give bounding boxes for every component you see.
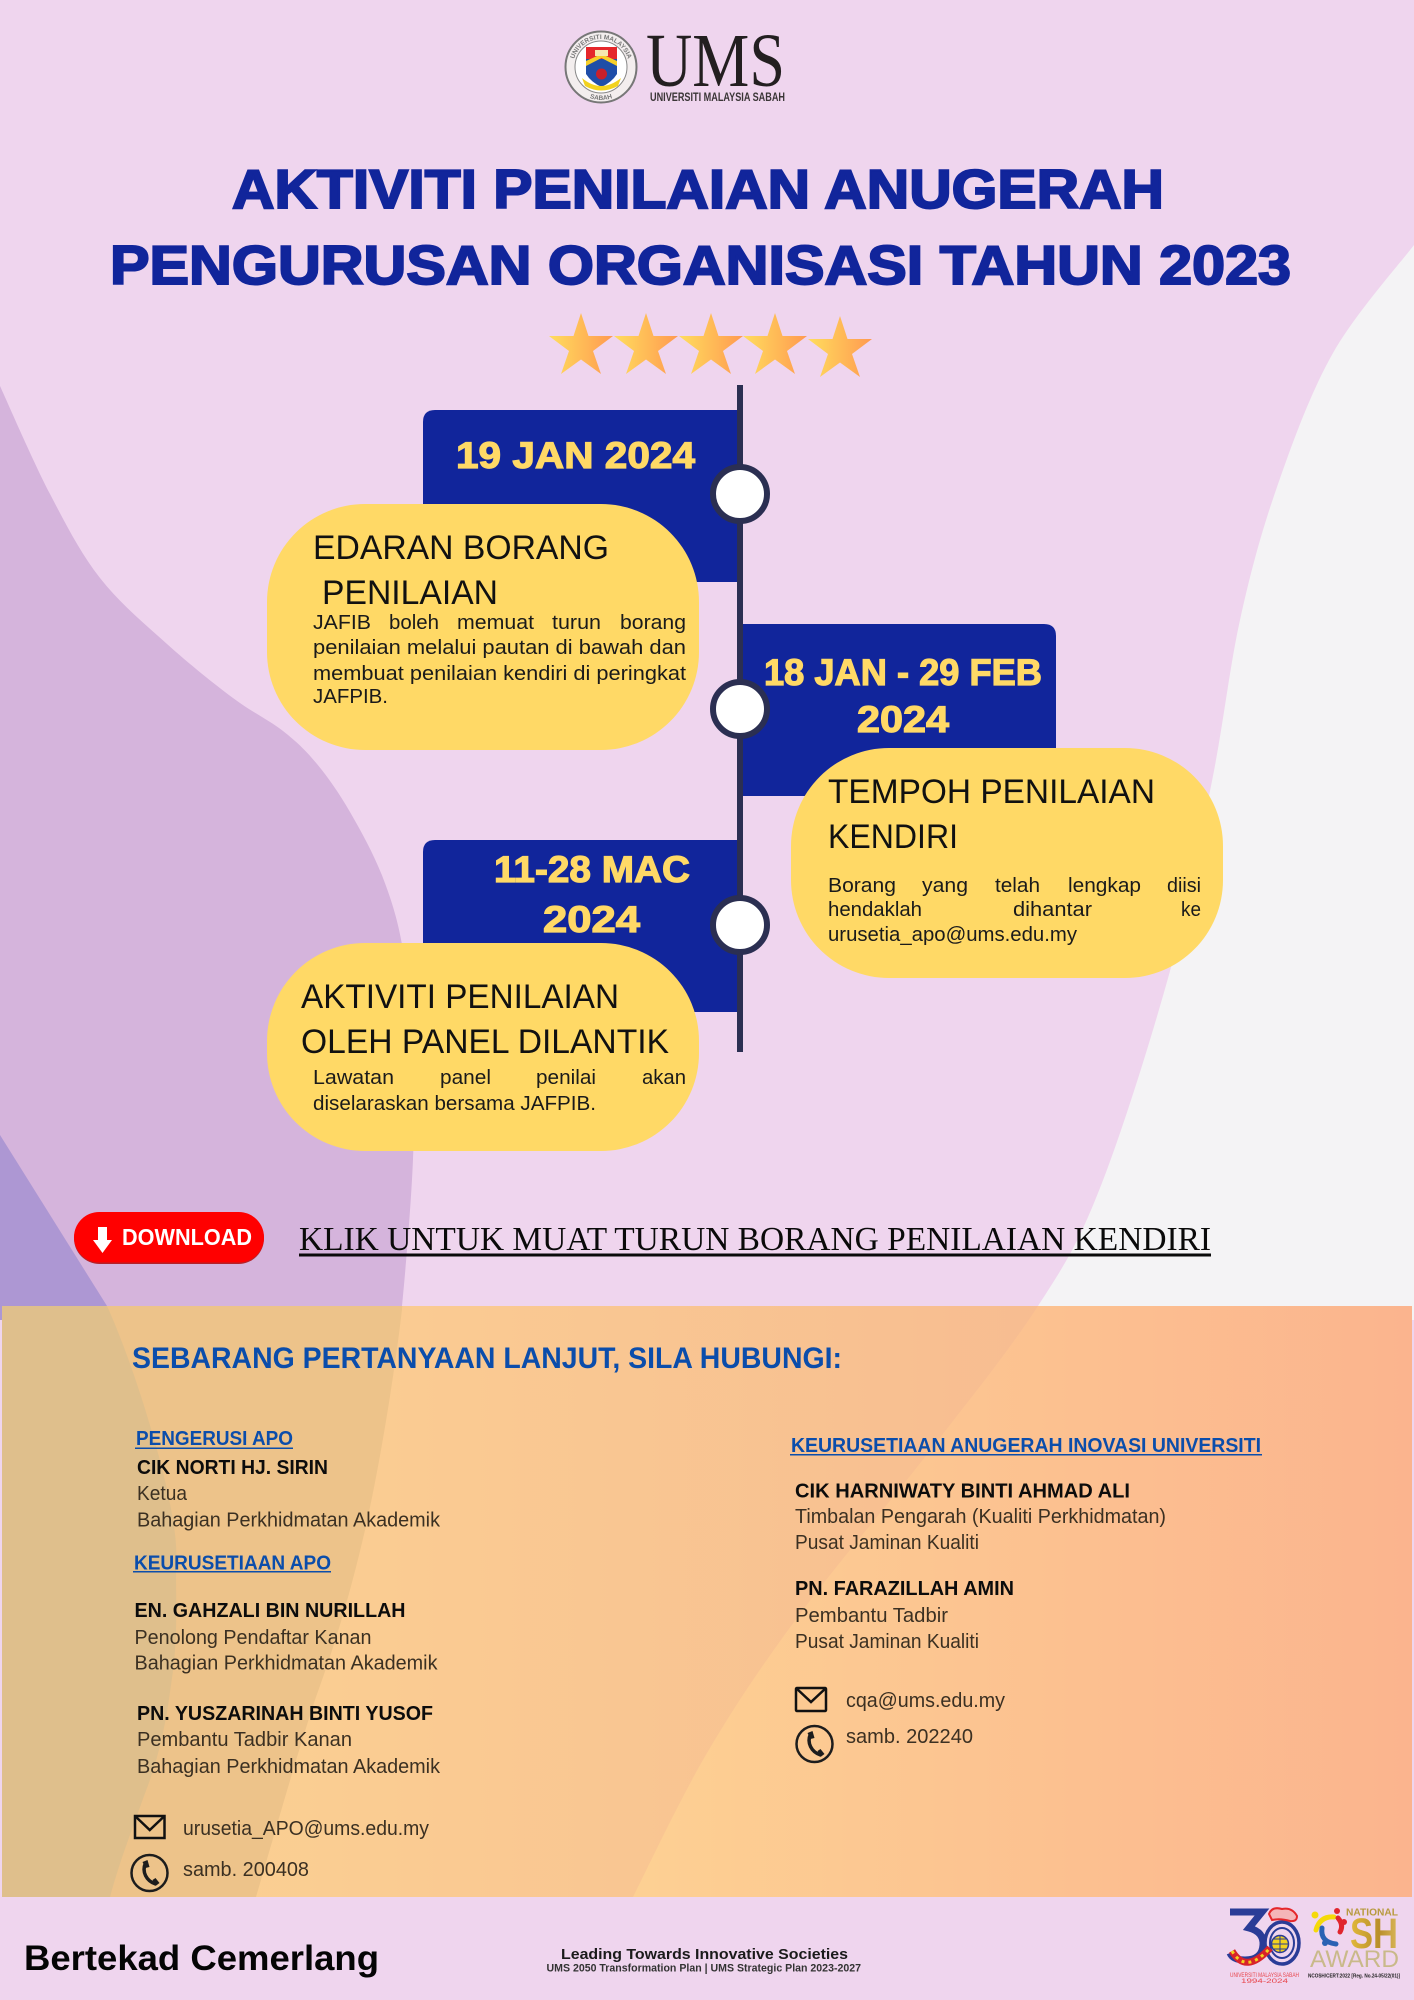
title	[110, 158, 1291, 296]
card: Edaran Borang Penilaian: PENILAIAN	[322, 574, 498, 612]
timeline marker 1	[713, 467, 767, 521]
card: Edaran Borang Penilaian: EDARAN BORANG	[313, 529, 609, 567]
card: Tempoh Penilaian Kendiri: KENDIRI	[828, 818, 958, 856]
heading: contact: SEBARANG PERTANYAAN LANJUT, SILA HUBUNGI:	[132, 1342, 842, 1375]
logo: UMS	[564, 19, 785, 104]
contact: Norti	[137, 1456, 441, 1532]
panel: contact background	[0, 1300, 1412, 1897]
contact: Farazillah: PN. FARAZILLAH AMIN	[795, 1577, 1014, 1600]
logo: UMS 30 years	[1230, 1908, 1299, 1985]
contact: Norti: Bahagian Perkhidmatan Akademik	[137, 1508, 441, 1532]
card: Tempoh Penilaian Kendiri: lengkap	[1068, 875, 1141, 897]
card: Edaran Borang Penilaian: turun	[552, 612, 601, 634]
title: PENGURUSAN ORGANISASI TAHUN 2023	[110, 234, 1291, 296]
icon: phone	[796, 1726, 832, 1762]
contact: Yuszarinah	[137, 1702, 441, 1778]
contact column left	[132, 1428, 441, 1891]
card: Aktiviti Penilaian oleh Panel Dilantik: penilai	[536, 1067, 596, 1089]
icon: phone	[132, 1855, 168, 1891]
certification: NCOSH/CERT:2022 [Reg. No.24-05/22(01)]	[1308, 1974, 1400, 1980]
date label 2: 2024	[857, 699, 949, 740]
caption	[1230, 1973, 1299, 1985]
contact: Gahzali: Bahagian Perkhidmatan Akademik	[134, 1652, 438, 1674]
card: Tempoh Penilaian Kendiri: yang	[922, 875, 968, 897]
people ring	[1312, 1908, 1347, 1946]
card: Tempoh Penilaian Kendiri: telah	[995, 875, 1040, 897]
caption: 1994-2024	[1241, 1979, 1289, 1985]
date box: 18 Jan - 29 Feb 2024	[740, 624, 1056, 796]
slogan: Bertekad Cemerlang	[24, 1939, 379, 1978]
date label 3: 11-28 MAC	[494, 849, 690, 890]
National: NATIONAL	[1346, 1908, 1398, 1918]
subheading: Keurusetiaan APO: KEURUSETIAAN APO	[134, 1552, 331, 1574]
contact: Harniwaty: Pusat Jaminan Kualiti	[795, 1531, 979, 1554]
contact: Harniwaty: Timbalan Pengarah (Kualiti Perkhidmatan)	[795, 1505, 1166, 1528]
download button: DOWNLOAD	[122, 1224, 252, 1250]
Award: AWARD	[1310, 1946, 1399, 1973]
logo: National OSH Award	[1308, 1908, 1400, 1980]
icon: envelope	[796, 1688, 826, 1711]
phone extension: samb. 200408	[183, 1858, 309, 1881]
email: urusetia_APO@ums.edu.my	[183, 1817, 430, 1840]
footer	[24, 1908, 1400, 1985]
wordmark university name: UNIVERSITI MALAYSIA SABAH	[650, 92, 785, 104]
card: Edaran Borang Penilaian: membuat penilaian kendiri di peringkat	[313, 663, 686, 685]
tagline: UMS 2050 Transformation Plan | UMS Strategic Plan 2023-2027	[546, 1962, 861, 1974]
contact: Yuszarinah: PN. YUSZARINAH BINTI YUSOF	[137, 1702, 433, 1725]
tagline	[546, 1947, 861, 1974]
timeline marker 2	[713, 682, 767, 736]
wordmark UMS: UMS	[646, 19, 785, 103]
digit 0 rings	[1265, 1922, 1299, 1964]
date label 1: 19 JAN 2024	[456, 435, 695, 476]
card: Edaran Borang Penilaian: penilaian melalui pautan di bawah dan	[313, 637, 686, 659]
email: cqa@ums.edu.my	[846, 1689, 1006, 1712]
batik band	[1232, 1948, 1270, 1962]
contact: Harniwaty: CIK HARNIWATY BINTI AHMAD ALI	[795, 1480, 1130, 1502]
contact: Norti: CIK NORTI HJ. SIRIN	[137, 1456, 328, 1479]
globe	[1272, 1936, 1288, 1952]
card: Tempoh Penilaian Kendiri: TEMPOH PENILAIAN	[828, 773, 1155, 811]
SH: SH	[1350, 1910, 1398, 1958]
card: Edaran Borang Penilaian: JAFPIB.	[313, 686, 388, 708]
card: Edaran Borang Penilaian: boleh	[389, 612, 439, 634]
card: Edaran Borang Penilaian: borang	[620, 612, 686, 634]
title: AKTIVITI PENILAIAN ANUGERAH	[232, 158, 1164, 220]
card: Tempoh Penilaian Kendiri: ke	[1181, 899, 1201, 921]
date label 2	[764, 652, 1042, 740]
card: Tempoh Penilaian Kendiri: Borang	[828, 875, 896, 897]
card: Edaran Borang Penilaian	[267, 504, 699, 750]
contact: Gahzali: Penolong Pendaftar Kanan	[134, 1626, 372, 1649]
timeline	[267, 385, 1223, 1151]
icon: envelope	[135, 1816, 164, 1838]
subheading: Keurusetiaan Anugerah: KEURUSETIAAN ANUGERAH INOVASI UNIVERSITI	[791, 1435, 1261, 1457]
red emblem	[1269, 1908, 1297, 1921]
contact column right	[790, 1435, 1262, 1762]
card: Edaran Borang Penilaian: memuat	[457, 612, 534, 634]
timeline line	[737, 385, 743, 1052]
contact: Farazillah: Pembantu Tadbir	[795, 1604, 948, 1627]
card: Tempoh Penilaian Kendiri: hendaklah	[828, 899, 922, 921]
timeline marker 3	[713, 898, 767, 952]
date box: 11-28 Mac 2024	[423, 840, 740, 1012]
card: Aktiviti Penilaian oleh Panel Dilantik	[267, 943, 699, 1151]
subheading: Pengerusi APO: PENGERUSI APO	[136, 1428, 293, 1450]
icon: university crest	[564, 30, 638, 104]
card: Aktiviti Penilaian oleh Panel Dilantik: panel	[440, 1067, 491, 1089]
date box: 19 Jan 2024	[423, 410, 740, 582]
card: Edaran Borang Penilaian: JAFIB	[313, 612, 371, 634]
icon: five stars	[549, 313, 872, 377]
caption: UNIVERSITI MALAYSIA SABAH	[1230, 1973, 1299, 1979]
download link text: KLIK UNTUK MUAT TURUN BORANG PENILAIAN KENDIRI	[299, 1221, 1211, 1258]
icon: university crest: SABAH	[590, 94, 612, 100]
icon: down arrow	[93, 1227, 112, 1253]
card: Tempoh Penilaian Kendiri: urusetia_apo@ums.edu.my	[828, 924, 1077, 946]
contact: Harniwaty	[795, 1480, 1166, 1554]
card: Aktiviti Penilaian oleh Panel Dilantik: akan	[642, 1067, 686, 1089]
card: Aktiviti Penilaian oleh Panel Dilantik: diselaraskan bersama JAFPIB.	[313, 1093, 596, 1115]
phone extension: samb. 202240	[846, 1725, 973, 1748]
card: Tempoh Penilaian Kendiri	[791, 748, 1223, 978]
date label 3: 2024	[543, 899, 640, 940]
card: Aktiviti Penilaian oleh Panel Dilantik: OLEH PANEL DILANTIK	[301, 1023, 669, 1061]
date label 3	[494, 849, 690, 940]
icon: university crest: UNIVERSITI MALAYSIA	[570, 34, 632, 59]
contact: Yuszarinah: Bahagian Perkhidmatan Akademik	[137, 1755, 441, 1778]
download button	[74, 1212, 264, 1264]
contact: Gahzali	[134, 1599, 438, 1674]
contact: Farazillah	[795, 1577, 1014, 1653]
contact: Yuszarinah: Pembantu Tadbir Kanan	[137, 1728, 352, 1751]
card: Tempoh Penilaian Kendiri: diisi	[1167, 875, 1201, 897]
date label 2: 18 JAN - 29 FEB	[764, 652, 1042, 693]
digit 3	[1230, 1912, 1263, 1960]
card: Tempoh Penilaian Kendiri: dihantar	[1013, 899, 1092, 921]
card: Aktiviti Penilaian oleh Panel Dilantik: AKTIVITI PENILAIAN	[301, 978, 619, 1016]
contact: Gahzali: EN. GAHZALI BIN NURILLAH	[134, 1599, 406, 1622]
card: Aktiviti Penilaian oleh Panel Dilantik: Lawatan	[313, 1067, 394, 1089]
contact: Farazillah: Pusat Jaminan Kualiti	[795, 1630, 979, 1653]
tagline: Leading Towards Innovative Societies	[561, 1947, 848, 1963]
contact: Norti: Ketua	[137, 1482, 188, 1505]
